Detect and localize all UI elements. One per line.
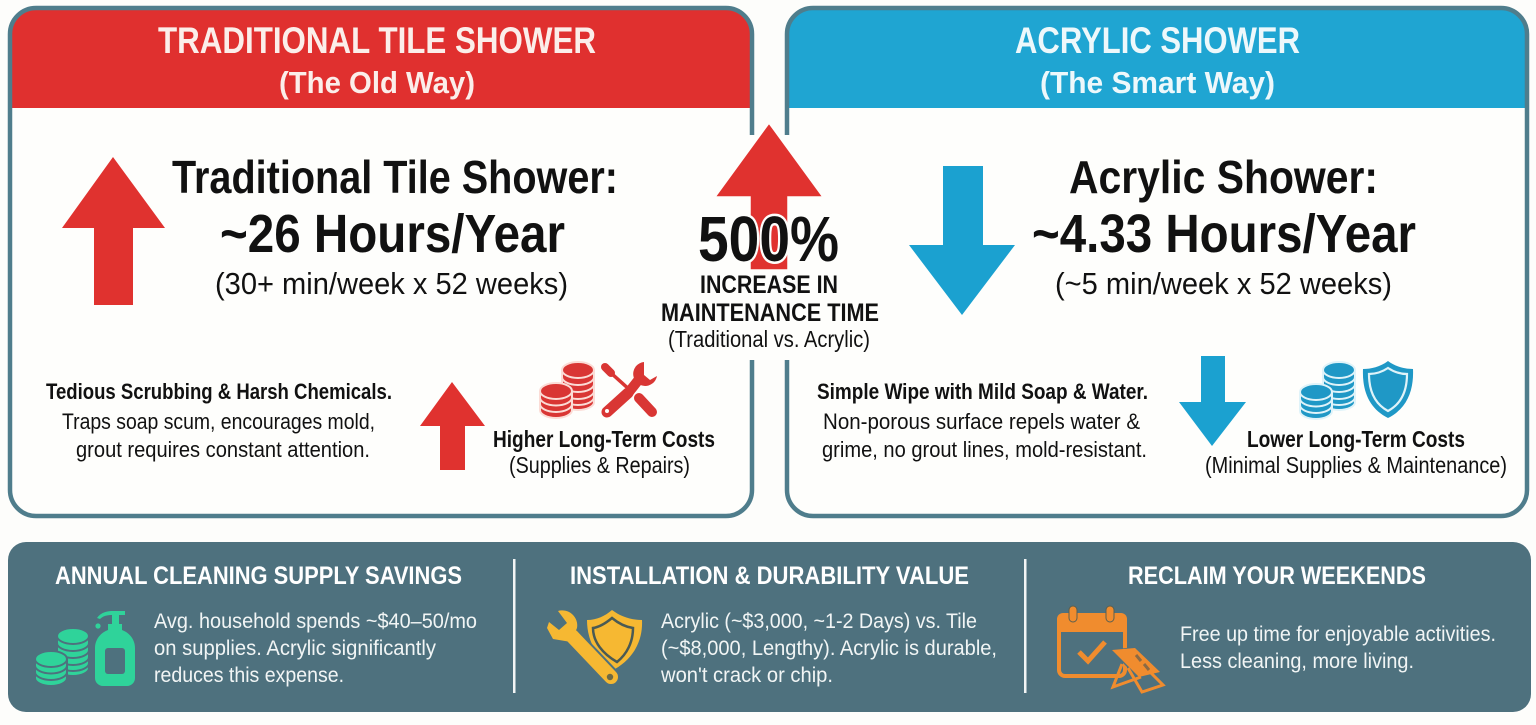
text: simple wipe: Non-porous surface repels water & [823, 409, 1140, 434]
header: acrylic shower: ACRYLIC SHOWER [1015, 20, 1300, 61]
text: installation body [660, 610, 997, 687]
text: weekends body [1180, 623, 1496, 673]
text: tedious scrubbing: grout requires constant attention. [76, 437, 370, 462]
icon: center red up arrow [715, 123, 823, 270]
section: reclaim your weekends: RECLAIM YOUR WEEKENDS [1128, 562, 1426, 590]
header: traditional tile shower [10, 8, 752, 108]
icon: blue coins [1300, 362, 1355, 419]
icon: small red up arrow [420, 382, 485, 470]
text: installation body: (~$8,000, Lengthy). Acrylic is durable, [661, 637, 997, 660]
stat: acrylic hours per year: Acrylic Shower: [1069, 151, 1378, 203]
text: tedious scrubbing [46, 379, 392, 462]
text: installation body: Acrylic (~$3,000, ~1-2 Days) vs. Tile [661, 610, 977, 633]
panel: acrylic shower [787, 8, 1527, 516]
text: increase in maintenance time: INCREASE IN [700, 271, 838, 299]
text: lower long-term costs [1205, 426, 1507, 478]
header: traditional tile shower: (The Old Way) [279, 65, 475, 100]
text: simple wipe [817, 379, 1148, 462]
text: weekends body: Free up time for enjoyable activities. [1180, 623, 1496, 646]
icon: red tools [605, 362, 657, 413]
stat: traditional hours per year [172, 151, 618, 301]
stat: traditional hours per year: Traditional Tile Shower: [172, 151, 618, 203]
stat: 500 percent: 500% [698, 203, 839, 275]
header: acrylic shower: (The Smart Way) [1040, 65, 1275, 100]
text: supply savings body: reduces this expense. [154, 664, 344, 687]
text: weekends body: Less cleaning, more living. [1180, 650, 1414, 673]
text: increase in maintenance time: MAINTENANCE TIME [661, 299, 879, 327]
icon: blue shield [1363, 361, 1413, 418]
icon: yellow wrench and shield [547, 610, 642, 680]
header: acrylic shower [787, 8, 1527, 108]
section: annual cleaning supply savings: ANNUAL CLEANING SUPPLY SAVINGS [55, 562, 462, 590]
stat: acrylic hours per year [1032, 151, 1416, 301]
icon: large blue down arrow [909, 166, 1015, 315]
text: supply savings body: on supplies. Acrylic significantly [154, 637, 436, 660]
text: higher long-term costs: Higher Long-Term Costs [493, 426, 715, 452]
panel: bottom benefits band [8, 542, 1531, 712]
text: increase in maintenance time [661, 271, 879, 352]
stat: traditional hours per year: (30+ min/week x 52 weeks) [215, 266, 568, 301]
text: tedious scrubbing: Tedious Scrubbing & Harsh Chemicals. [46, 379, 392, 404]
section: reclaim your weekends [1057, 562, 1496, 692]
text: supply savings body [154, 610, 477, 687]
stat: traditional hours per year: ~26 Hours/Year [220, 204, 565, 264]
header: traditional tile shower: TRADITIONAL TILE SHOWER [158, 20, 596, 61]
text: supply savings body: Avg. household spends ~$40–50/mo [154, 610, 477, 633]
text: simple wipe: grime, no grout lines, mold-resistant. [822, 437, 1147, 462]
icon: teal coins and soap pump [35, 611, 135, 686]
icon: small blue down arrow [1179, 356, 1246, 446]
text: simple wipe: Simple Wipe with Mild Soap & Water. [817, 379, 1148, 404]
text: higher long-term costs [493, 426, 715, 478]
section: installation and durability value [547, 562, 997, 687]
section: annual cleaning supply savings [35, 562, 477, 687]
text: lower long-term costs: Lower Long-Term Costs [1247, 426, 1465, 452]
callout: 500 percent increase [661, 123, 879, 360]
stat: acrylic hours per year: ~4.33 Hours/Year [1032, 204, 1416, 264]
text: tedious scrubbing: Traps soap scum, encourages mold, [62, 409, 375, 434]
text: higher long-term costs: (Supplies & Repairs) [509, 452, 690, 478]
panel: traditional tile shower [10, 8, 752, 516]
icon: orange calendar and beach chair [1057, 606, 1163, 692]
icon: red coins [540, 362, 594, 418]
icon: large red up arrow [62, 157, 165, 305]
text: installation body: won't crack or chip. [660, 664, 833, 687]
section: installation and durability value: INSTALLATION & DURABILITY VALUE [570, 562, 969, 590]
text: increase in maintenance time: (Traditional vs. Acrylic) [668, 326, 870, 352]
stat: acrylic hours per year: (~5 min/week x 52 weeks) [1055, 266, 1392, 301]
